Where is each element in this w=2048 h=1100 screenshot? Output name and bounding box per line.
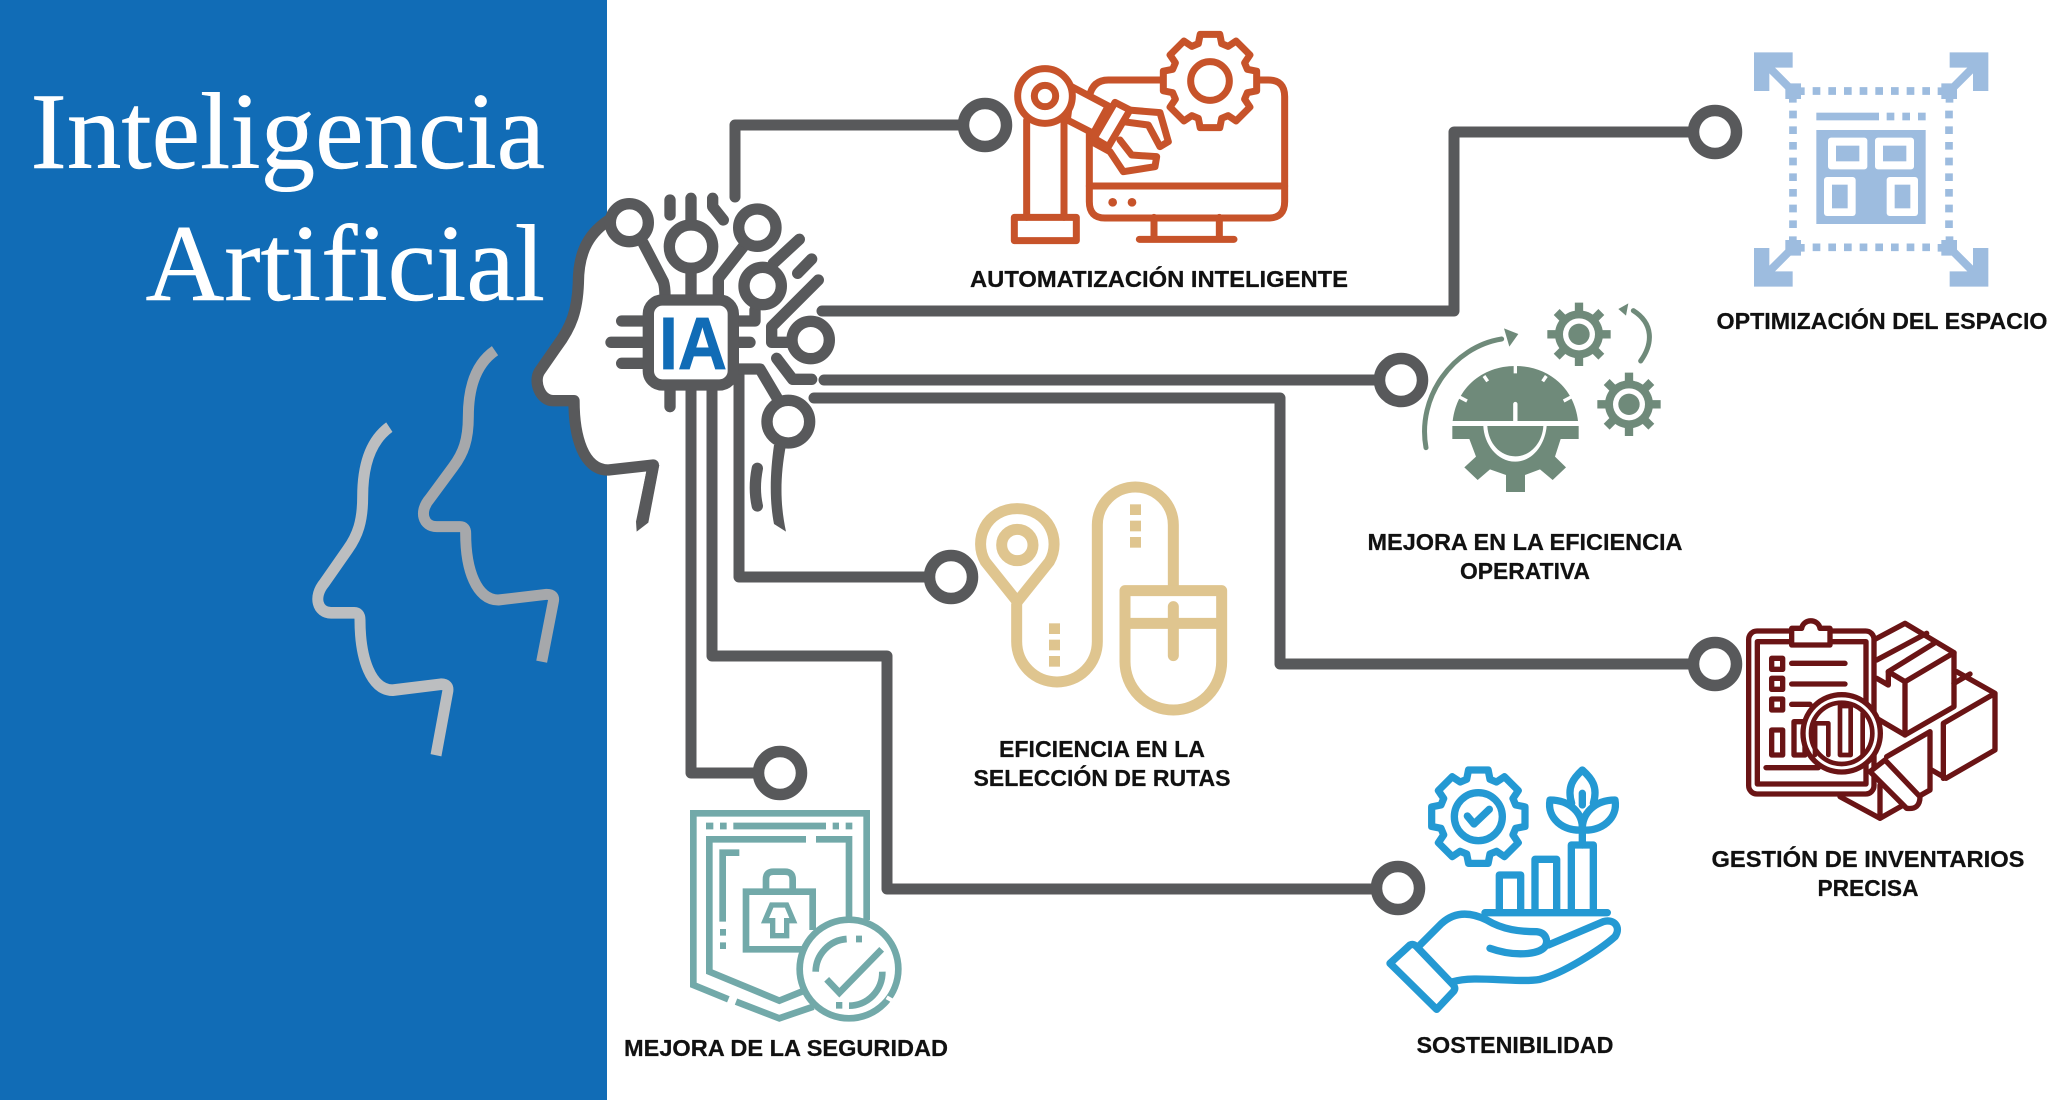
icon: AI head with circuit chip [537,198,829,532]
icon: security shield, lock and check [693,813,898,1018]
label: inventarios: PRECISA [1818,875,1919,901]
label: inventarios: GESTIÓN DE INVENTARIOS [1712,845,2024,872]
icon: two grey face silhouettes [318,351,554,755]
title: Artificial [146,203,545,324]
label: automatización: AUTOMATIZACIÓN INTELIGENTE [970,265,1348,292]
icon: inventory clipboard, boxes and magnifier [1749,621,1995,818]
connector lines from chip to nodes [691,125,1715,889]
title [31,71,545,324]
label: eficiencia operativa: MEJORA EN LA EFICIENCIA [1368,529,1683,555]
icon: operational efficiency gears [1425,303,1661,492]
connector end nodes [758,104,1736,910]
label: eficiencia rutas [974,736,1230,791]
label: seguridad: MEJORA DE LA SEGURIDAD [624,1035,948,1061]
icon: sustainability hand, gear and plant [1390,770,1617,1009]
chip label IA: IA [659,302,727,385]
label: eficiencia operativa: OPERATIVA [1460,558,1590,584]
panel: blue left background [0,0,607,1100]
label: sostenibilidad: SOSTENIBILIDAD [1416,1032,1614,1058]
icon: route selection pin and mouse [981,487,1222,710]
icon: robot arm and monitor [1014,34,1285,241]
title: Inteligencia [31,71,545,192]
label: eficiencia rutas: SELECCIÓN DE RUTAS [974,764,1230,791]
label: inventarios [1712,845,2024,901]
label: optimización: OPTIMIZACIÓN DEL ESPACIO [1716,307,2048,334]
label: eficiencia rutas: EFICIENCIA EN LA [999,736,1205,762]
label: eficiencia operativa [1368,529,1683,584]
icon: space optimization [1754,52,1988,287]
